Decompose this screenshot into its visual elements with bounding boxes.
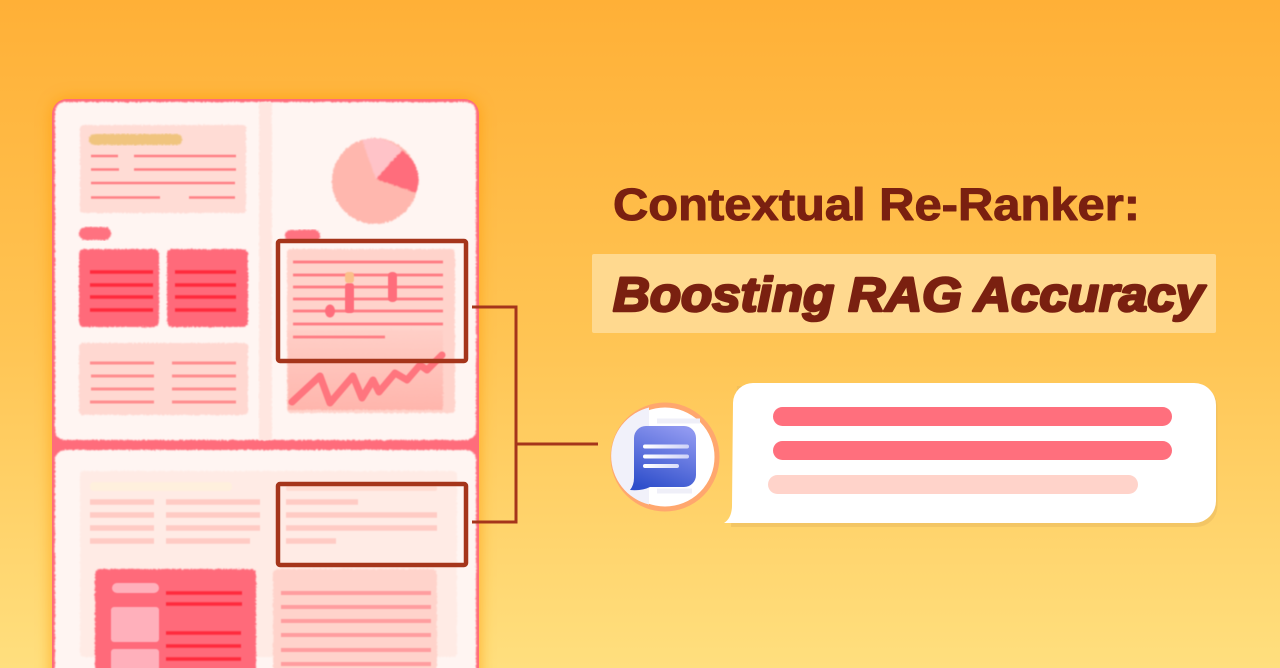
panel: blurred document <box>52 99 479 668</box>
message bubble <box>724 383 1218 527</box>
icon: chat bubble <box>630 426 696 490</box>
card: lower right lines <box>273 569 437 668</box>
card: top left summary <box>80 125 246 213</box>
document page: top <box>55 102 476 440</box>
pie chart <box>332 138 419 224</box>
connector bracket <box>472 307 598 522</box>
label pill: left <box>79 227 111 240</box>
icon: chat avatar <box>611 405 717 509</box>
card: red lower left <box>95 569 256 668</box>
document page: bottom <box>55 450 476 668</box>
heading: Contextual Re-Ranker: <box>613 179 1140 230</box>
card: right chart <box>287 249 455 413</box>
highlighted subtitle <box>592 254 1216 333</box>
highlight box: lower <box>278 484 466 565</box>
card: lower left table <box>79 343 248 415</box>
highlighted subtitle: Boosting RAG Accuracy <box>613 269 1206 322</box>
highlight box: upper <box>278 241 466 361</box>
label pill: right <box>285 230 320 241</box>
card: red left <box>79 249 159 327</box>
card: pale text block <box>80 471 457 657</box>
card: red right <box>167 249 248 327</box>
